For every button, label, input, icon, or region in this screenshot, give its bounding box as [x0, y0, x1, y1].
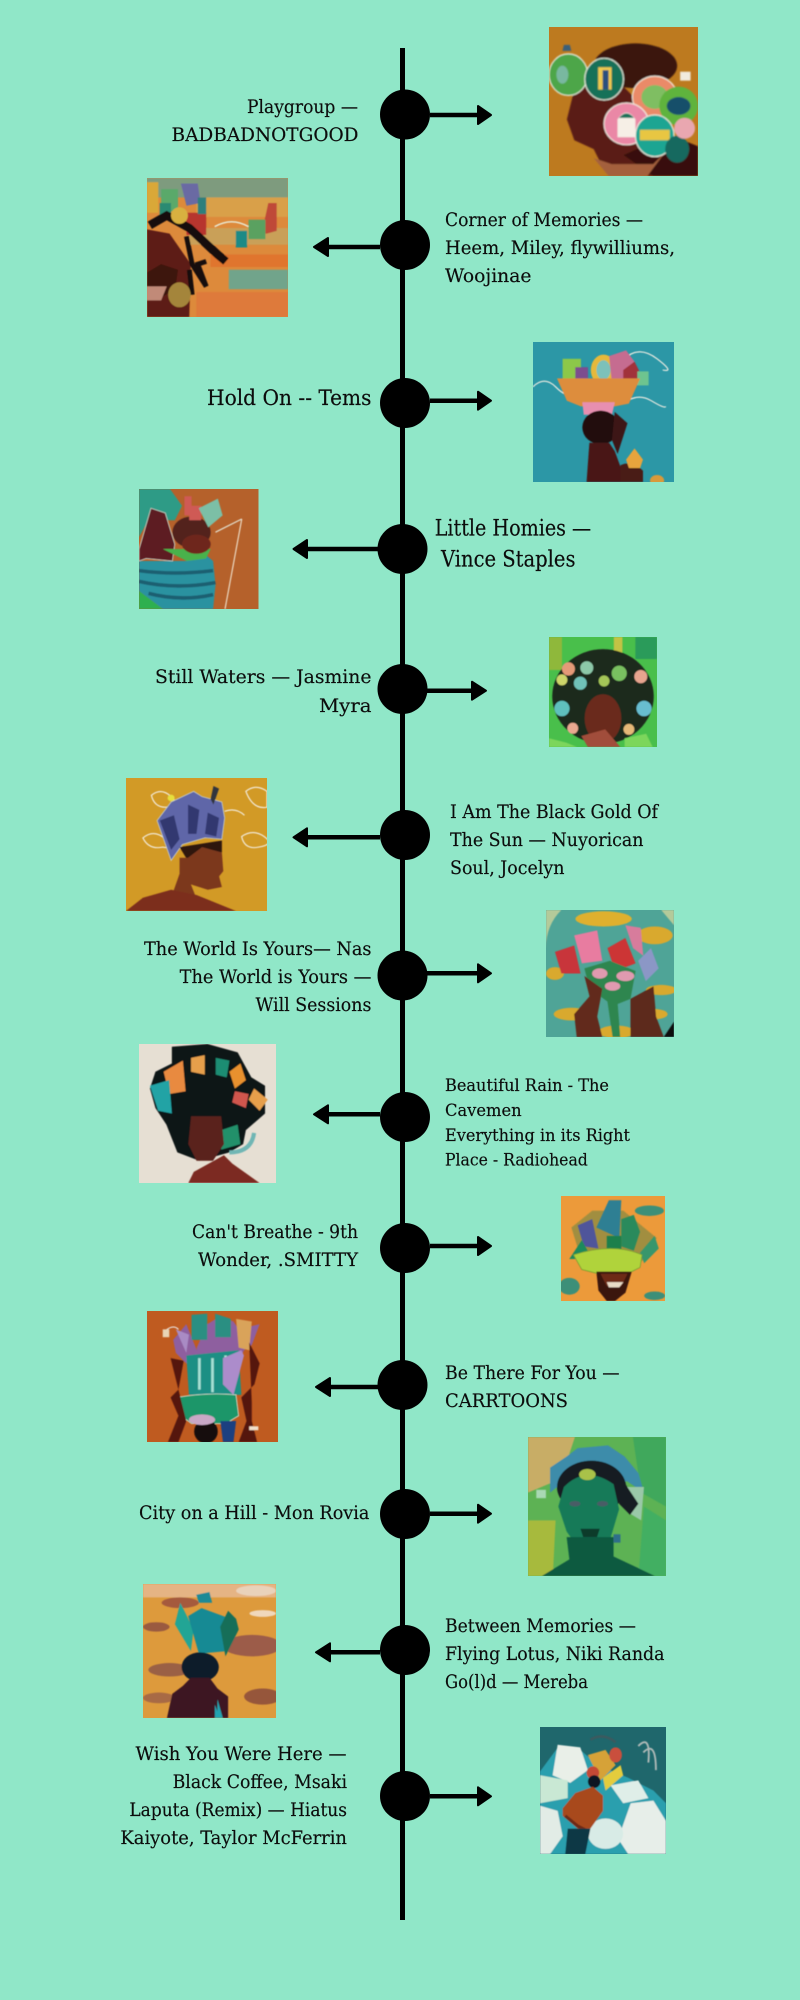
- label 1: [172, 96, 358, 146]
- timeline node 12: [380, 1625, 430, 1675]
- label 7: The World is Yours —: [180, 966, 371, 988]
- timeline node 10: [378, 1360, 428, 1410]
- arrow right 13: [430, 1787, 491, 1805]
- entry 1: Playgroup: [172, 27, 698, 176]
- arrow right 9: [430, 1237, 491, 1255]
- timeline node 11: [380, 1489, 430, 1539]
- artwork 13: figure in clouds: [540, 1727, 666, 1854]
- arrow right 5: [427, 682, 486, 700]
- artwork 6: profile with a crown of buildings: [126, 778, 267, 911]
- artwork 10: figure carrying a waterfall: [147, 1311, 278, 1442]
- label 7: Will Sessions: [256, 994, 371, 1016]
- label 2: Woojinae: [445, 265, 532, 287]
- entry 5: Still Waters: [155, 637, 657, 747]
- label 7: [144, 938, 372, 1016]
- timeline node 4: [378, 524, 428, 574]
- arrow right 1: [430, 106, 491, 124]
- label 1: Playgroup —: [247, 96, 358, 118]
- label 10: Be There For You —: [445, 1362, 620, 1384]
- label 11: City on a Hill - Mon Rovia: [139, 1502, 369, 1524]
- label 13: Wish You Were Here —: [136, 1743, 346, 1765]
- entry 4: Little Homies: [139, 489, 591, 609]
- label 6: I Am The Black Gold Of: [450, 801, 660, 823]
- timeline node 13: [380, 1771, 430, 1821]
- arrow left 12: [316, 1643, 380, 1661]
- arrow left 4: [294, 540, 378, 558]
- timeline node 7: [378, 950, 428, 1000]
- timeline node 5: [378, 664, 428, 714]
- artwork 4: mother carrying a baby: [139, 489, 258, 609]
- arrow right 7: [427, 964, 491, 982]
- label 8: Place - Radiohead: [445, 1151, 588, 1171]
- artwork 9: smiling figure under a green hat: [561, 1196, 665, 1301]
- arrow right 3: [430, 392, 491, 410]
- entry 8: Beautiful Rain and Everything in its Right Place: [139, 1044, 631, 1183]
- label 13: Kaiyote, Taylor McFerrin: [120, 1827, 347, 1849]
- entry 13: Wish You Were Here and Laputa: [120, 1727, 666, 1854]
- label 10: [445, 1362, 620, 1412]
- entry 12: Between Memories and Go(l)d: [143, 1584, 664, 1718]
- label 13: [120, 1743, 348, 1849]
- timeline node 3: [380, 378, 430, 428]
- label 9: Can't Breathe - 9th: [192, 1221, 358, 1243]
- arrow left 6: [294, 828, 380, 846]
- label 5: [155, 666, 372, 717]
- label 1: BADBADNOTGOOD: [172, 124, 358, 146]
- label 4: Vince Staples: [440, 548, 576, 573]
- arrow right 11: [430, 1505, 491, 1523]
- label 9: [192, 1221, 359, 1271]
- label 12: Flying Lotus, Niki Randa: [445, 1643, 664, 1665]
- entry 9: Can't Breathe: [192, 1196, 665, 1301]
- artwork 2: portrait with locs and city: [147, 178, 288, 317]
- artwork 3: figure carrying a basket of houses: [533, 342, 674, 482]
- label 3: Hold On -- Tems: [207, 386, 372, 410]
- label 7: The World Is Yours— Nas: [144, 938, 372, 960]
- timeline node 1: [380, 90, 430, 140]
- timeline node 2: [380, 220, 430, 270]
- arrow left 10: [316, 1378, 378, 1396]
- entry 10: Be There For You: [147, 1311, 620, 1443]
- label 4: [435, 517, 591, 573]
- label 4: Little Homies —: [435, 517, 591, 542]
- label 13: Black Coffee, Msaki: [173, 1771, 348, 1793]
- label 2: [445, 209, 675, 287]
- timeline node 6: [380, 810, 430, 860]
- timeline node 8: [380, 1092, 430, 1142]
- entry 6: I Am The Black Gold Of The Sun: [126, 778, 660, 911]
- timeline node 9: [380, 1223, 430, 1273]
- label 12: Go(l)d — Mereba: [445, 1671, 588, 1693]
- label 13: Laputa (Remix) — Hiatus: [129, 1799, 347, 1821]
- label 6: Soul, Jocelyn: [450, 857, 564, 879]
- timeline axis: [400, 48, 405, 1920]
- entry 3: Hold On: [207, 342, 674, 486]
- arrow left 2: [314, 238, 380, 256]
- artwork 5: afro with houses: [549, 637, 657, 747]
- entry 2: Corner of Memories: [147, 178, 675, 317]
- artwork 8: afro with houses on cream: [139, 1044, 276, 1183]
- artwork 11: green portrait with blue houses: [528, 1437, 666, 1576]
- artwork 12: figure from behind against orange clouds: [143, 1584, 276, 1718]
- label 10: CARRTOONS: [445, 1390, 568, 1412]
- label 5: Still Waters — Jasmine: [155, 666, 372, 688]
- label 6: [450, 801, 660, 879]
- label 8: Beautiful Rain - The: [445, 1076, 609, 1096]
- label 5: Myra: [319, 695, 372, 717]
- label 2: Corner of Memories —: [445, 209, 643, 231]
- label 12: [445, 1615, 664, 1693]
- artwork 1: profile with bubble houses: [549, 27, 698, 176]
- entry 7: The World Is Yours: [144, 910, 677, 1038]
- label 8: Everything in its Right: [445, 1126, 631, 1146]
- label 8: [445, 1076, 631, 1171]
- label 12: Between Memories —: [445, 1615, 636, 1637]
- artwork 7: hands holding a bouquet of buildings: [546, 910, 674, 1037]
- label 9: Wonder, .SMITTY: [198, 1249, 359, 1271]
- entry 11: City on a Hill: [139, 1437, 666, 1576]
- label 8: Cavemen: [445, 1101, 522, 1121]
- label 6: The Sun — Nuyorican: [450, 829, 644, 851]
- label 2: Heem, Miley, flywilliums,: [445, 237, 675, 259]
- arrow left 8: [314, 1105, 380, 1123]
